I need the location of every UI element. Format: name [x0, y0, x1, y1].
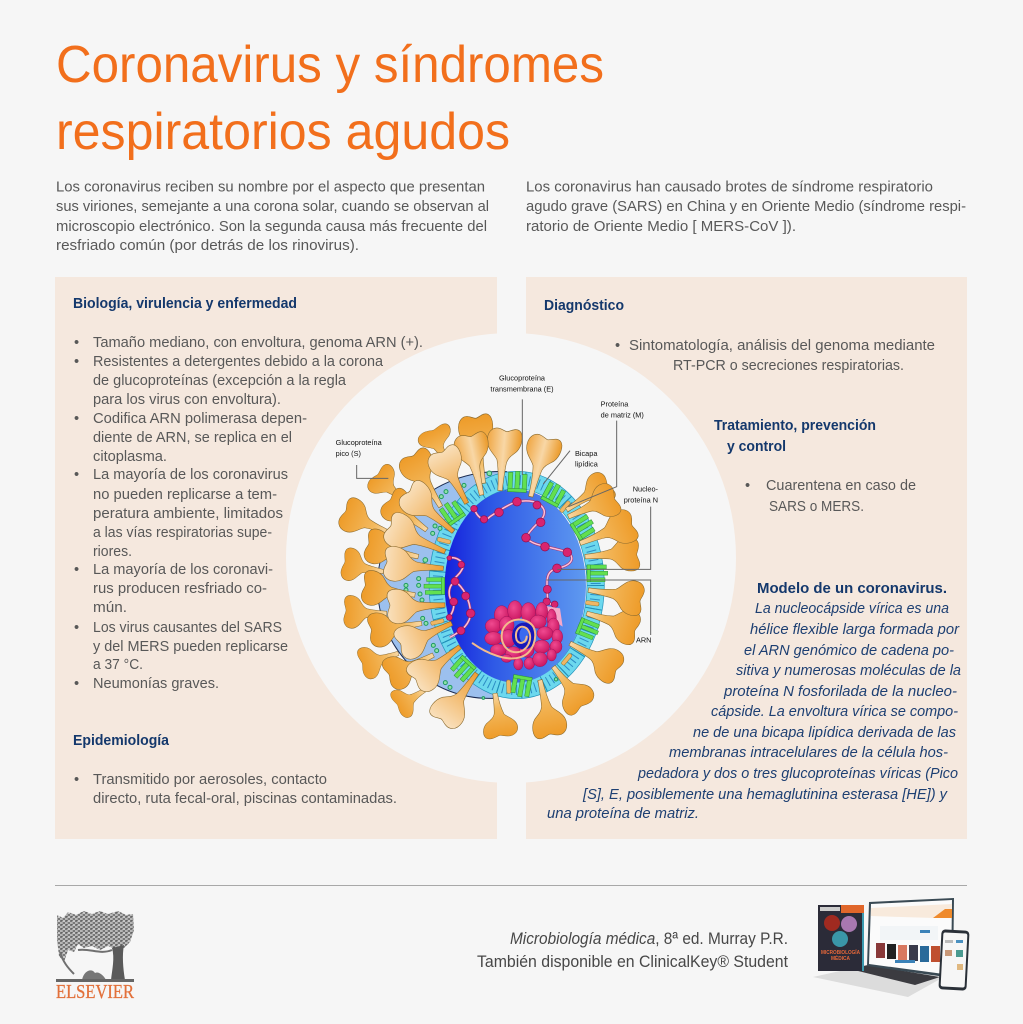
bullet list: biology: • — [74, 335, 79, 351]
bullet: treatment: Cuarentena en caso de — [766, 478, 916, 494]
text block: model description: una proteína de matriz. — [547, 805, 699, 822]
bullet: diagnosis: RT-PCR o secreciones respiratorias. — [673, 358, 904, 374]
label: matrix protein — [601, 400, 644, 419]
intro text right — [526, 180, 966, 235]
divider — [55, 885, 967, 886]
bullet list: biology: peratura ambiente, limitados — [93, 506, 283, 522]
bullet list: biology: a las vías respiratorias supe- — [93, 525, 272, 541]
illustration: book, laptop and phone — [813, 898, 970, 997]
title: Coronavirus y síndromes — [56, 36, 604, 94]
book: MÉDICA — [831, 954, 850, 962]
bullet list: epidemiology: directo, ruta fecal-oral, piscinas contaminadas. — [93, 791, 397, 807]
intro text left: sus viriones, semejante a una corona solar, cuando se observan al — [56, 199, 489, 215]
citation text — [477, 930, 788, 971]
label: lipid bilayer — [575, 449, 599, 469]
title: respiratorios agudos — [56, 103, 510, 161]
label: matrix protein: de matriz (M) — [601, 410, 644, 419]
bullet list: biology: La mayoría de los coronavi- — [93, 562, 273, 578]
bullet list: biology: Tamaño mediano, con envoltura, genoma ARN (+). — [93, 335, 423, 351]
heading: biology: Biología, virulencia y enfermedad — [73, 295, 297, 312]
label: transmembrane glycoprotein: Glucoproteína — [499, 374, 546, 383]
leader lines — [357, 399, 651, 635]
intro text right: ratorio de Oriente Medio [ MERS-CoV ]). — [526, 219, 796, 235]
text block: model description: el ARN genómico de cadena po- — [744, 642, 954, 659]
label: nucleoprotein — [624, 485, 659, 504]
citation text: También disponible en ClinicalKey® Student — [477, 953, 788, 971]
label: nucleoprotein: proteína N — [624, 495, 658, 504]
bullet list: biology: La mayoría de los coronavirus — [93, 467, 288, 483]
label: lipid bilayer: lipídica — [575, 460, 599, 469]
light blue envelope crescent — [377, 472, 507, 698]
label: transmembrane glycoprotein — [490, 374, 554, 394]
laptop — [813, 898, 954, 997]
bullet list: biology: • — [74, 676, 79, 692]
label: spike glycoprotein: Glucoproteína — [336, 438, 383, 447]
bullet list: biology: • — [74, 562, 79, 578]
text block: model description: membranas intracelulares de la célula hos- — [669, 744, 948, 761]
text block: model description: proteína N fosforilada de la nucleo- — [723, 683, 957, 700]
wordmark: ELSEVIER — [56, 981, 135, 1003]
label: matrix protein: Proteína — [601, 400, 629, 409]
text block: model description: ne de una bicapa lipídica derivada de las — [693, 724, 956, 741]
bullet list: biology: • — [74, 467, 79, 483]
bullet list: biology: de glucoproteínas (excepción a la regla — [93, 373, 347, 389]
intro text left: resfriado común (por detrás de los rinovirus). — [56, 238, 359, 254]
bullet: diagnosis: • — [615, 338, 620, 354]
title — [56, 36, 604, 161]
diagram: coronavirus virion — [336, 374, 659, 740]
heading: treatment: Tratamiento, prevención — [714, 417, 876, 434]
phone — [938, 929, 970, 991]
bullet list: biology: mún. — [93, 600, 127, 616]
matrix proteins — [430, 500, 599, 693]
bullet: treatment: • — [745, 478, 750, 494]
nucleoprotein beads — [446, 497, 572, 635]
panel: biology and epidemiology — [55, 277, 497, 839]
heading: epidemiology: Epidemiología — [73, 732, 170, 749]
heading: model: Modelo de un coronavirus. — [757, 580, 947, 597]
core — [445, 489, 586, 683]
bullet list: biology: Resistentes a detergentes debido a la corona — [93, 354, 384, 370]
green particles — [404, 471, 558, 699]
heading: diagnosis: Diagnóstico — [544, 297, 624, 314]
membrane segments — [438, 480, 596, 690]
citation text: Microbiología médica, 8ª ed. Murray P.R. — [510, 930, 788, 948]
heading: treatment: y control — [727, 438, 786, 455]
intro text left: microscopio electrónico. Son la segunda causa más frecuente del — [56, 219, 487, 235]
bullet list: biology: Neumonías graves. — [93, 676, 219, 692]
text block: model description: pedadora y dos o tres glucoproteínas víricas (Pico — [637, 765, 958, 782]
bullet list: biology — [74, 335, 423, 692]
bullet list: biology: riores. — [93, 544, 132, 560]
icon: tree — [56, 911, 134, 982]
bullet list: biology: • — [74, 411, 79, 427]
nucleocapsid strand — [447, 501, 572, 637]
bullet list: biology: • — [74, 354, 79, 370]
intro text right: agudo grave (SARS) en China y en Oriente Medio (síndrome respi- — [526, 199, 966, 215]
bullet list: biology: diente de ARN, se replica en el — [93, 430, 292, 446]
label: spike glycoprotein — [336, 438, 383, 458]
text block: model description: sitiva y numerosas moléculas de la — [736, 662, 961, 679]
text block: model description — [547, 600, 961, 822]
label: spike glycoprotein: pico (S) — [336, 449, 361, 458]
bullet list: epidemiology: • — [74, 772, 79, 788]
book — [818, 905, 864, 971]
intro text left: Los coronavirus reciben su nombre por el aspecto que presentan — [56, 180, 485, 196]
coiled nucleocapsid — [473, 601, 563, 670]
panel: diagnosis, treatment and model — [526, 277, 967, 839]
bullet: treatment: SARS o MERS. — [769, 499, 864, 515]
bullet: diagnosis: Sintomatología, análisis del genoma mediante — [629, 338, 935, 354]
label: transmembrane glycoprotein: transmembrana (E) — [490, 385, 554, 394]
central circle background — [286, 333, 736, 783]
bullet list: biology: citoplasma. — [93, 449, 167, 465]
bullet list: epidemiology: Transmitido por aerosoles, contacto — [93, 772, 327, 788]
bullet list: biology: Los virus causantes del SARS — [93, 620, 282, 636]
label: RNA: ARN — [636, 635, 651, 644]
label: nucleoprotein: Nucleo- — [633, 485, 659, 494]
intro text left — [56, 180, 489, 254]
intro text right: Los coronavirus han causado brotes de síndrome respiratorio — [526, 180, 933, 196]
bullet: diagnosis — [615, 338, 935, 374]
text block: model description: [S], E, posiblemente una hemaglutinina esterasa [HE]) y — [582, 786, 948, 803]
label: lipid bilayer: Bicapa — [575, 449, 598, 458]
heading: treatment — [714, 417, 876, 455]
bullet list: biology: a 37 °C. — [93, 657, 143, 673]
bullet list: biology: Codifica ARN polimerasa depen- — [93, 411, 307, 427]
bullet list: biology: no pueden replicarse a tem- — [93, 487, 277, 503]
transmembrane glycoproteins — [424, 471, 608, 698]
bullet list: biology: • — [74, 620, 79, 636]
bullet list: epidemiology — [74, 772, 397, 807]
logo: Elsevier — [56, 911, 135, 1003]
spike glycoproteins — [336, 413, 646, 740]
bullet list: biology: y del MERS pueden replicarse — [93, 639, 288, 655]
book: MICROBIOLOGÍA — [821, 948, 860, 956]
text block: model description: cápside. La envoltura vírica se compo- — [711, 703, 958, 720]
bullet list: biology: rus producen resfriado co- — [93, 581, 267, 597]
text block: model description: hélice flexible larga formada por — [750, 621, 960, 638]
text block: model description: La nucleocápside vírica es una — [755, 600, 949, 617]
bullet: treatment — [745, 478, 916, 515]
bullet list: biology: para los virus con envoltura). — [93, 392, 281, 408]
